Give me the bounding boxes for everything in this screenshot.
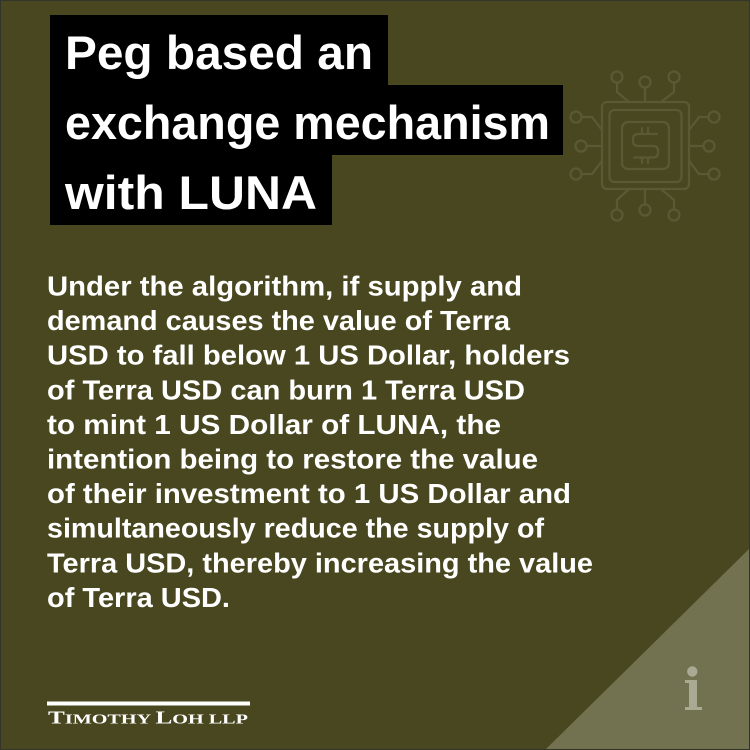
body text: simultaneously reduce the supply of [47,513,545,544]
icon: info letter [685,666,702,710]
body text [47,270,593,613]
body text: to mint 1 US Dollar of LUNA, the [47,409,501,440]
body text: of Terra USD can burn 1 Terra USD [47,374,525,405]
title: Peg based an [65,26,373,79]
icon: digital dollar chip [570,72,720,220]
body text: intention being to restore the value [47,444,538,474]
body text: Under the algorithm, if supply and [47,270,522,302]
footer logo: T IMOTHY L OH LLP [48,708,249,728]
body text: of Terra USD. [47,582,230,613]
title [50,15,563,225]
body text: demand causes the value of Terra [47,305,510,336]
footer logo [47,702,250,728]
body text: of their investment to 1 US Dollar and [47,478,571,509]
body text: USD to fall below 1 US Dollar, holders [47,340,570,371]
title: exchange mechanism [65,96,550,149]
title: with LUNA [64,166,317,219]
body text: Terra USD, thereby increasing the value [47,547,593,578]
corner triangle [546,549,749,749]
